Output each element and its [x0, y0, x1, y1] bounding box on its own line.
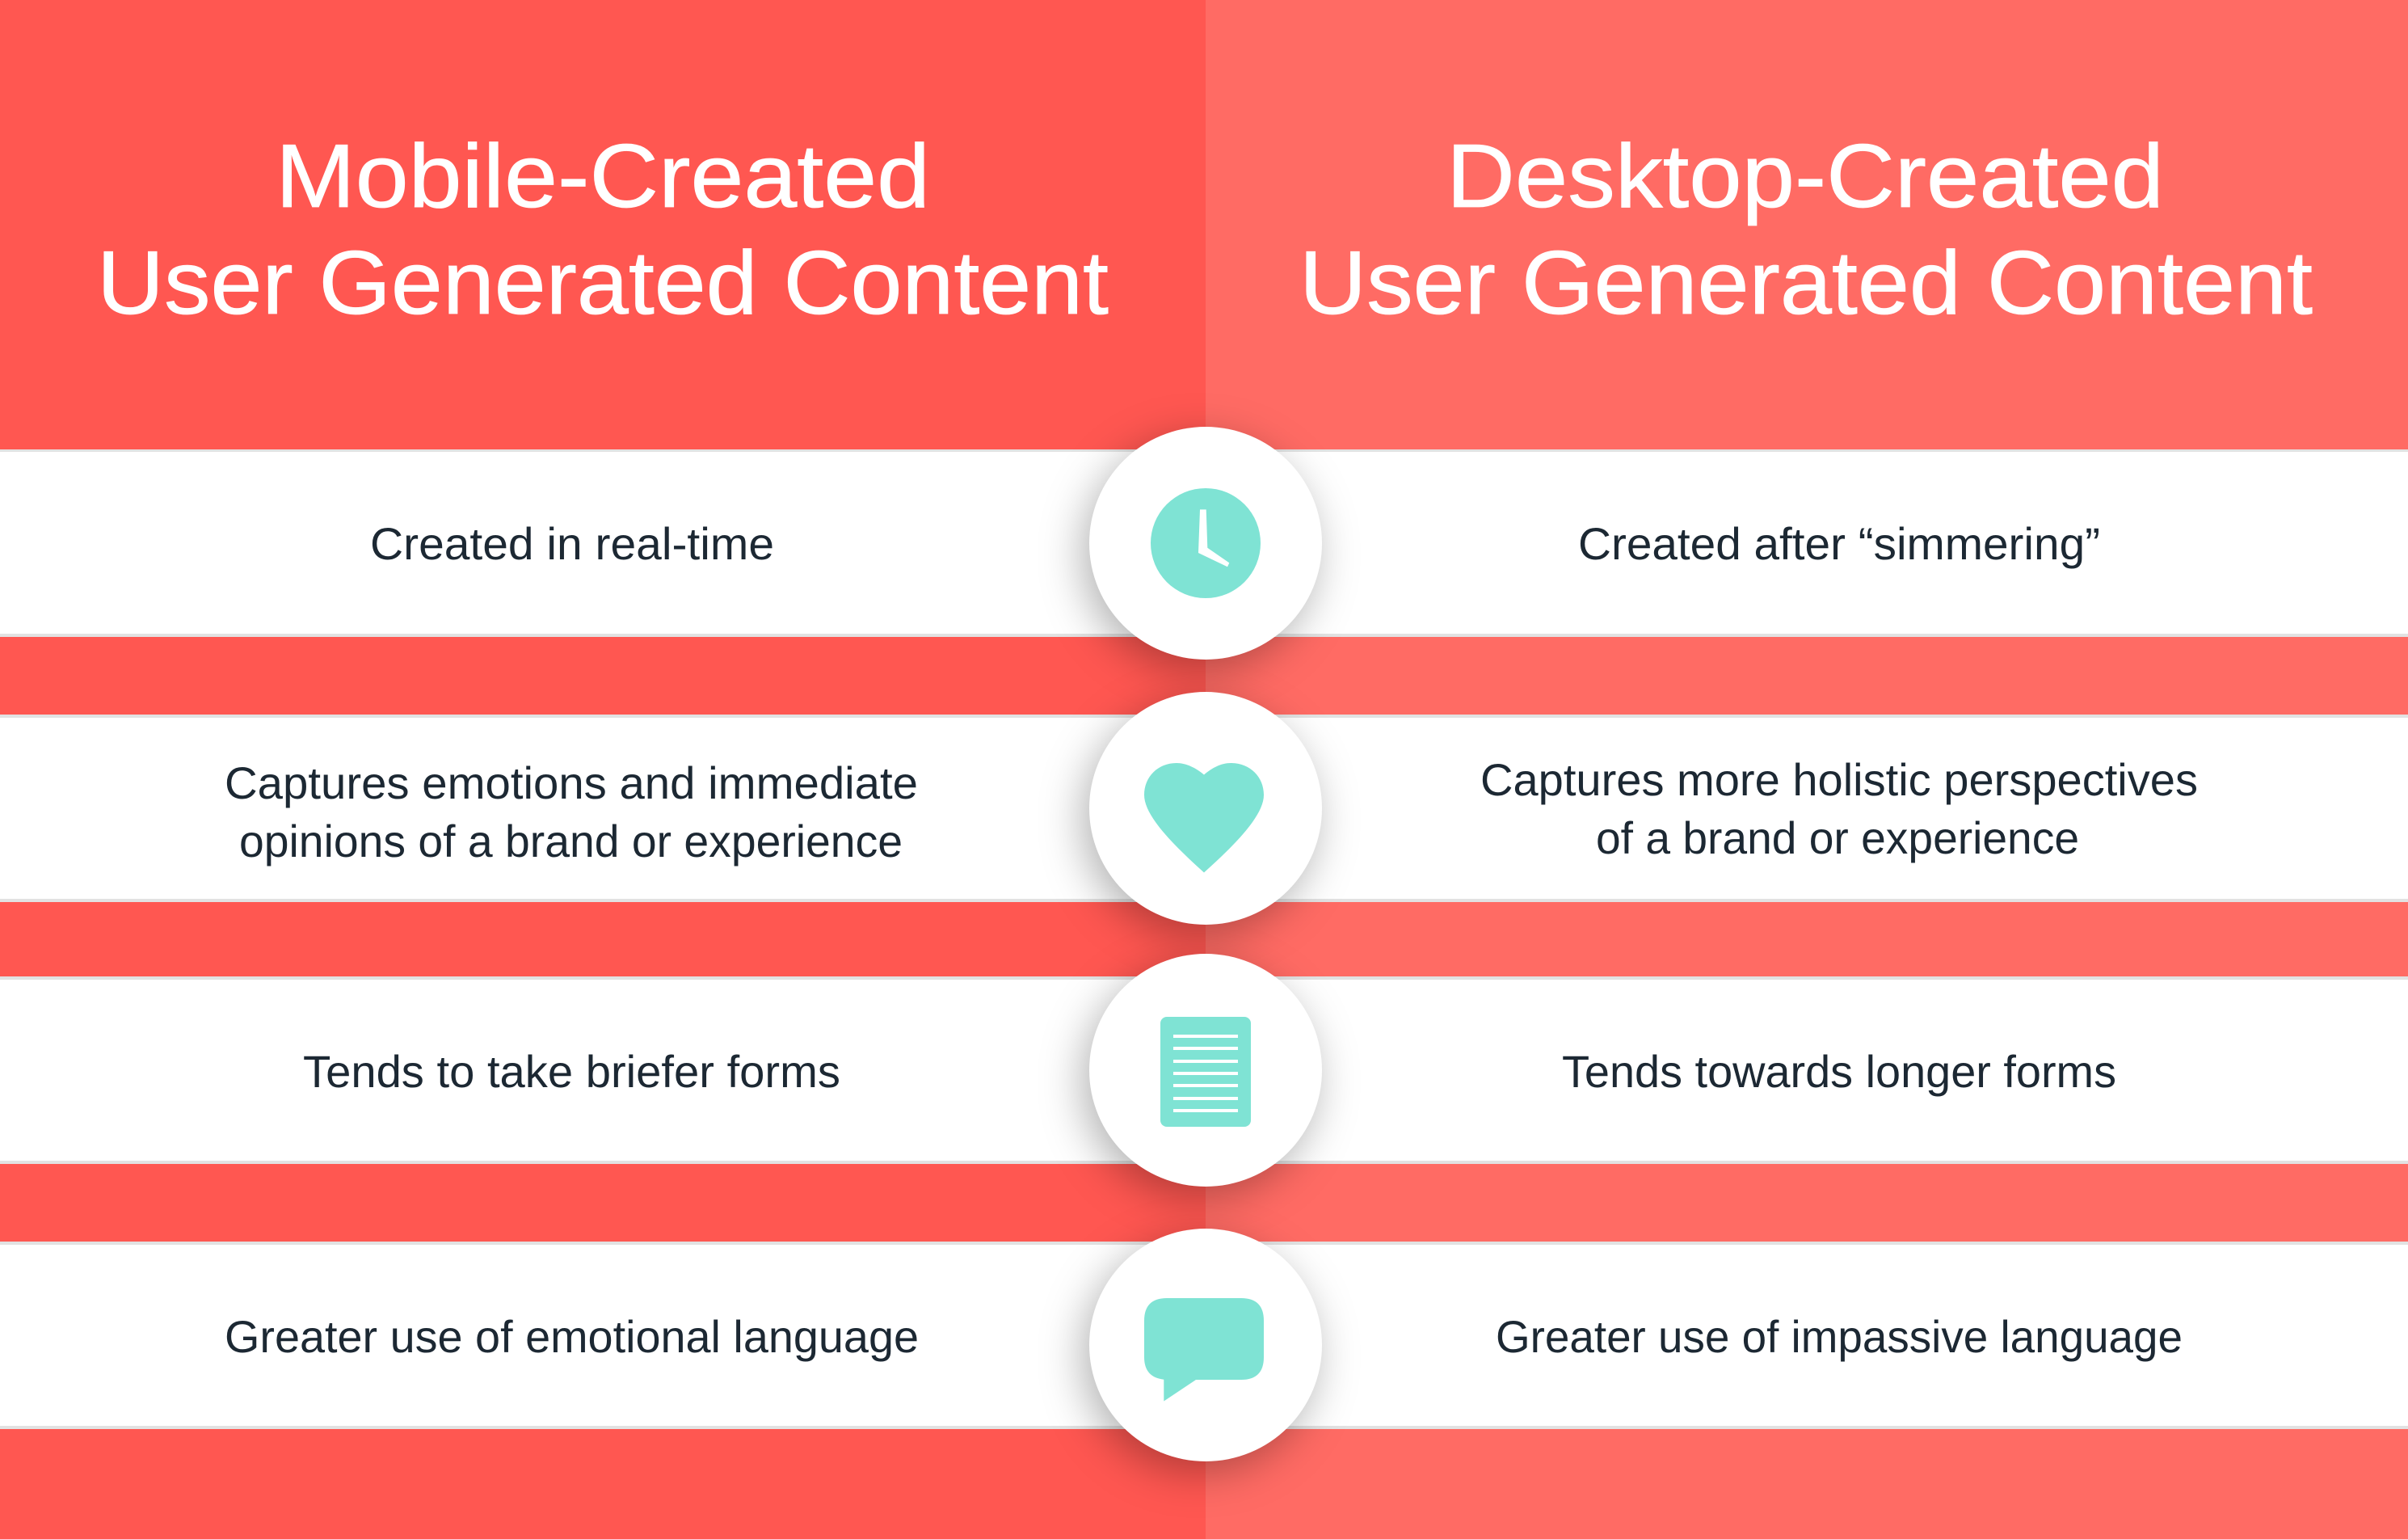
icon circle: speech bubble — [1089, 1229, 1322, 1461]
text: created after simmering: Created after “simmering” — [1578, 518, 2100, 569]
row band 2 — [0, 715, 2408, 902]
heading: desktop-created: Desktop-Created — [1446, 126, 2164, 226]
heading: desktop-created — [1299, 126, 2313, 333]
text: longer forms: Tends towards longer forms — [1562, 1046, 2116, 1097]
panel: mobile column background — [0, 0, 1206, 1539]
heading: mobile-created — [97, 126, 1109, 333]
heading: desktop-created: User Generated Content — [1299, 233, 2313, 333]
row band 3 — [0, 976, 2408, 1164]
text: emotional language: Greater use of emotional language — [225, 1311, 919, 1362]
text: captures emotions — [225, 757, 918, 866]
text: captures holistic perspectives: Captures more holistic perspectives — [1480, 754, 2198, 805]
heading: mobile-created: User Generated Content — [97, 233, 1109, 333]
icon circle: heart — [1089, 692, 1322, 925]
text: impassive language: Greater use of impassive language — [1496, 1311, 2183, 1362]
text: briefer forms: Tends to take briefer forms — [303, 1046, 840, 1097]
text: captures emotions: Captures emotions and immediate — [225, 757, 918, 808]
text: captures emotions: opinions of a brand or experience — [239, 816, 903, 866]
icon circle: clock — [1089, 427, 1322, 660]
panel: desktop column background — [1206, 0, 2408, 1539]
text: created in real-time: Created in real-time — [370, 518, 774, 569]
heading: mobile-created: Mobile-Created — [276, 126, 930, 226]
row band 4 — [0, 1242, 2408, 1429]
row band 1 — [0, 449, 2408, 637]
text: captures holistic perspectives — [1480, 754, 2198, 863]
text: captures holistic perspectives: of a brand or experience — [1596, 812, 2079, 863]
icon circle: document — [1089, 954, 1322, 1187]
